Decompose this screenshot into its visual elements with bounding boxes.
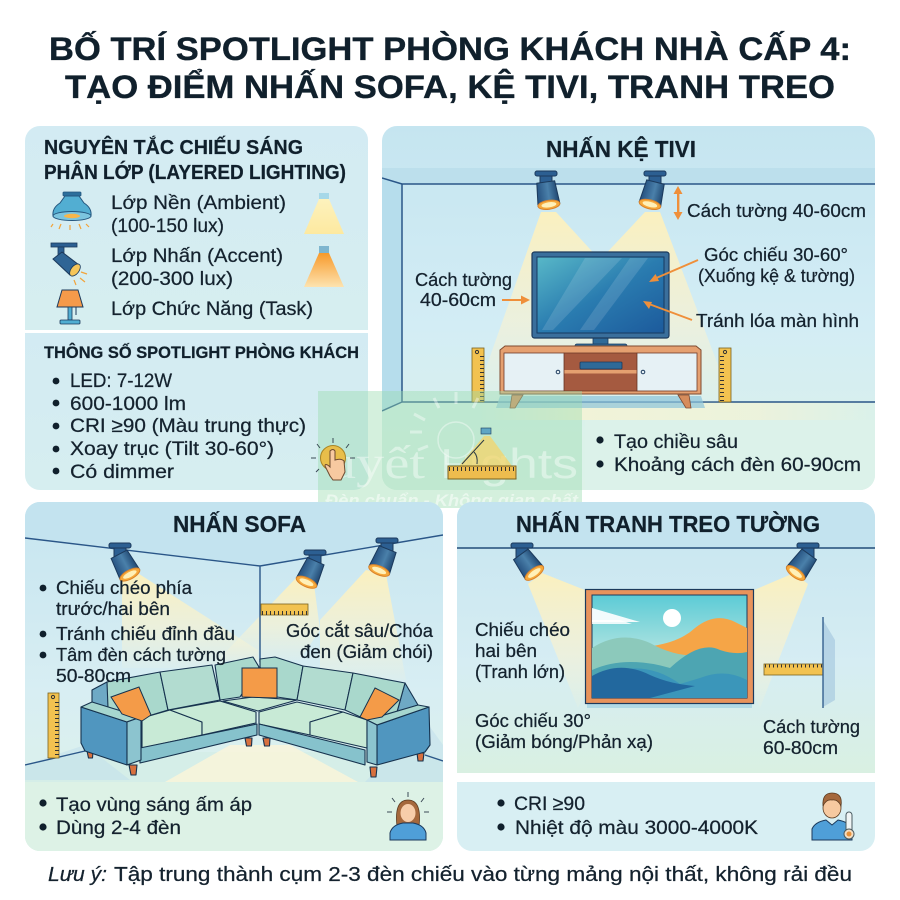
icon: ambient lamp — [51, 192, 91, 230]
list: specifications: Xoay trục (Tilt 30-60°) — [70, 438, 274, 460]
list: sofa notes — [39, 794, 252, 839]
label: beam angle 30 — [475, 711, 653, 752]
room outlines — [25, 535, 443, 765]
list: sofa tips — [40, 578, 235, 686]
pillows — [111, 668, 399, 721]
spotlight left — [511, 543, 546, 583]
label: beam angle 30: Góc chiếu 30° — [475, 711, 591, 731]
panel: spotlight specifications — [25, 333, 368, 490]
ruler left — [472, 348, 484, 402]
list: wall art notes: Nhiệt độ màu 3000-4000K — [515, 817, 758, 839]
text: ambient layer: (100-150 lux) — [111, 215, 224, 237]
TV console — [500, 346, 701, 408]
text: ambient layer — [111, 192, 286, 237]
label: avoid glare: Tránh lóa màn hình — [696, 311, 859, 331]
list: wall art notes: CRI ≥90 — [514, 793, 585, 815]
title: TẠO ĐIỂM NHẤN SOFA, KỆ TIVI, TRANH TREO — [65, 69, 835, 105]
floor band — [382, 402, 875, 490]
list: specifications: CRI ≥90 (Màu trung thực) — [70, 415, 306, 437]
label: beam angle — [698, 245, 855, 286]
list: sofa notes: Tạo vùng sáng ấm áp — [56, 794, 252, 816]
wall outlines — [382, 178, 875, 411]
icon: man with thermometer — [812, 793, 854, 840]
heading: layered lighting: PHÂN LỚP (LAYERED LIGHTING) — [44, 160, 346, 184]
label: wall distance: 60-80cm — [763, 738, 838, 758]
heading: layered lighting: NGUYÊN TẮC CHIẾU SÁNG — [44, 135, 303, 159]
list: specifications: 600-1000 lm — [70, 393, 186, 415]
panel: wall art accent — [457, 502, 875, 773]
label: deep cut: Góc cắt sâu/Chóa — [286, 620, 434, 641]
label: deep cut: đen (Giảm chói) — [300, 642, 433, 662]
painting — [586, 590, 754, 708]
label: cross lighting: hai bên — [475, 641, 537, 661]
icon: angle ruler — [448, 428, 516, 479]
list: sofa tips: 50-80cm — [56, 666, 131, 686]
label: distance from wall left — [415, 270, 512, 310]
watermark: Lights — [440, 440, 578, 487]
title — [49, 31, 851, 105]
label: wall distance: Cách tường — [763, 717, 860, 737]
shelf floor shadow — [496, 396, 705, 408]
list: sofa tips: Chiếu chéo phía — [56, 578, 193, 598]
label: distance from wall left: 40-60cm — [420, 290, 496, 310]
bottom note box — [585, 420, 875, 490]
spotlight right — [784, 543, 819, 583]
arrow: avoid glare — [643, 301, 692, 320]
list: specifications — [53, 370, 306, 483]
heading: layered lighting — [44, 135, 346, 184]
panel: sofa accent — [25, 502, 443, 851]
icon: accent light cone — [304, 246, 344, 287]
ruler: wall height — [48, 693, 59, 758]
heading: specifications: THÔNG SỐ SPOTLIGHT PHÒNG KHÁCH — [44, 342, 359, 362]
ruler and wall — [764, 617, 835, 708]
list: sofa tips: trước/hai bên — [56, 599, 170, 619]
text: task layer: Lớp Chức Năng (Task) — [111, 298, 313, 320]
ceiling line — [457, 547, 875, 549]
label: cross lighting — [475, 620, 570, 682]
icon: accent spotlight — [51, 243, 87, 285]
spotlight left — [535, 171, 560, 211]
sofa — [81, 657, 430, 777]
label: beam angle 30: (Giảm bóng/Phản xạ) — [475, 732, 653, 752]
panel: wall art notes — [457, 782, 875, 851]
panel: layered lighting principles — [25, 126, 368, 330]
label: beam angle: Góc chiếu 30-60° — [704, 245, 848, 265]
label: distance from wall top: Cách tường 40-60cm — [687, 200, 866, 221]
spotlight 2 — [295, 550, 326, 591]
watermark: Đèn chuẩn - Không gian chất — [325, 491, 579, 510]
label: wall distance — [763, 717, 860, 758]
ruler: ceiling — [261, 604, 308, 615]
heading: sofa: NHẤN SOFA — [173, 510, 306, 537]
label: cross lighting: Chiếu chéo — [475, 620, 570, 640]
text: ambient layer: Lớp Nền (Ambient) — [111, 192, 286, 214]
icon: task table lamp — [57, 290, 83, 324]
spotlight 3 — [367, 538, 398, 579]
list: specifications: LED: 7-12W — [70, 370, 173, 392]
icon: dimmer hand — [311, 438, 355, 480]
light cones — [528, 573, 808, 708]
list: TV notes: Tạo chiều sâu — [614, 431, 738, 453]
spotlight right — [638, 171, 666, 211]
label: deep cut — [286, 620, 434, 662]
watermark: uyết — [328, 437, 425, 488]
panel: TV shelf accent — [382, 126, 875, 490]
floor — [25, 752, 443, 851]
list: wall art notes — [497, 793, 758, 839]
spotlight 1 — [109, 543, 142, 584]
light cones and glow — [25, 570, 443, 782]
footer note: Tập trung thành cụm 2-3 đèn chiếu vào từng mảng nội thất, không rải đều — [114, 864, 852, 886]
television — [532, 252, 669, 349]
icon: ambient light cone — [304, 193, 344, 234]
list: TV notes — [596, 431, 861, 476]
title: BỐ TRÍ SPOTLIGHT PHÒNG KHÁCH NHÀ CẤP 4: — [49, 31, 851, 67]
label: cross lighting: (Tranh lớn) — [475, 662, 565, 682]
light cones — [474, 212, 732, 402]
list: sofa notes: Dùng 2-4 đèn — [56, 817, 181, 839]
footer note: Lưu ý: — [48, 864, 107, 886]
list: specifications: Có dimmer — [70, 461, 175, 483]
arrow: ceiling distance — [674, 186, 682, 220]
heading: TV shelf: NHẤN KỆ TIVI — [546, 135, 696, 162]
floor glow — [536, 402, 822, 420]
list: sofa tips: Tránh chiếu đỉnh đầu — [56, 624, 235, 644]
text: accent layer: Lớp Nhấn (Accent) — [111, 245, 283, 267]
label: distance from wall left: Cách tường — [415, 270, 512, 290]
arrow: left distance — [502, 296, 530, 304]
text: accent layer — [111, 245, 283, 290]
arrow: beam angle — [649, 260, 698, 282]
heading: wall art: NHẤN TRANH TREO TƯỜNG — [516, 510, 820, 537]
text: accent layer: (200-300 lux) — [111, 268, 233, 290]
list: sofa tips: Tâm đèn cách tường — [56, 645, 226, 665]
icon: woman — [387, 792, 429, 840]
watermark — [318, 391, 582, 510]
label: beam angle: (Xuống kệ & tường) — [698, 266, 855, 286]
list: TV notes: Khoảng cách đèn 60-90cm — [614, 454, 861, 476]
ruler right — [719, 348, 731, 402]
